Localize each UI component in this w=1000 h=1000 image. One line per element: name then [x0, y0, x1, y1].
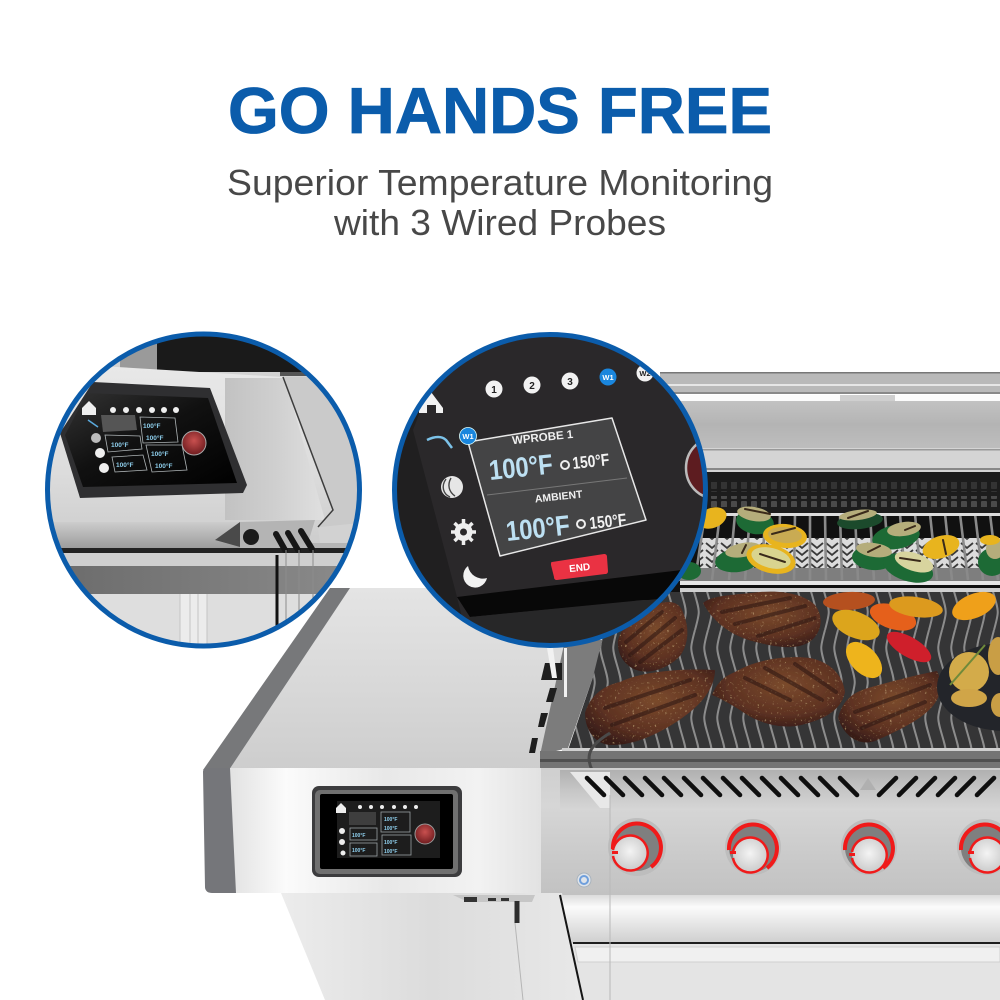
display logo: [415, 824, 435, 844]
screen icons: [82, 401, 179, 473]
right side panel: [282, 376, 334, 528]
screen temperatures: 100°F: [143, 422, 160, 430]
screen temperatures: 100°F: [116, 461, 133, 469]
ambient label: AMBIENT: [534, 488, 584, 505]
callout: display detail: [397, 337, 703, 643]
knob 3: [841, 819, 897, 875]
steak sear marks: [605, 598, 930, 728]
display temperatures: 100°F: [384, 840, 397, 846]
target temperature: 150°F: [571, 450, 610, 473]
number buttons: 1: [491, 385, 497, 396]
icon: probe: [427, 437, 452, 448]
peppers: [823, 586, 1000, 685]
side panel front: [203, 768, 541, 893]
end button: END: [569, 562, 591, 575]
screen temperatures: 100°F: [151, 450, 168, 458]
skillet with potatoes: [937, 637, 1000, 731]
ambient target temperature: 150°F: [588, 510, 627, 533]
side shelf: [203, 588, 565, 770]
grill wall: [540, 640, 610, 755]
display temperatures: [352, 817, 397, 855]
display boxes: [349, 812, 411, 856]
title: GO HANDS FREE: [228, 74, 772, 147]
left bezel: [397, 412, 461, 614]
lit highlight: [225, 378, 325, 520]
lower black band: [457, 569, 690, 617]
display icons: [336, 803, 418, 856]
subtitle: [227, 162, 773, 243]
side cabinet: [281, 893, 583, 1000]
lower rail: [54, 524, 348, 644]
grilled zucchini: [677, 503, 1000, 588]
w1 badge: W1: [462, 432, 474, 441]
screen logo: [182, 431, 206, 455]
display temperatures: 100°F: [384, 817, 397, 823]
base dark: [413, 337, 703, 620]
icon: home: [419, 392, 443, 413]
knob 1: [608, 818, 666, 876]
callout: probe ports: [50, 336, 357, 644]
screen temperatures: 100°F: [155, 462, 172, 470]
subtitle: with 3 Wired Probes: [333, 202, 666, 243]
w1 badge: [460, 428, 476, 444]
screen temperatures: 100°F: [146, 434, 163, 442]
probe in steak: [589, 733, 610, 792]
lower drawer: [560, 895, 1000, 1000]
subtitle: Superior Temperature Monitoring: [227, 162, 773, 203]
ambient target icon: [577, 520, 585, 528]
display temperatures: 100°F: [352, 833, 365, 839]
number buttons: W1: [602, 373, 614, 382]
callout 1 ring: [48, 334, 360, 646]
number buttons: 3: [567, 377, 573, 388]
cooking grates: [540, 592, 1000, 768]
number buttons: [486, 364, 654, 398]
callout 2 ring: [394, 334, 706, 646]
probe ports under panel: [453, 895, 535, 1000]
end button: [551, 554, 608, 580]
knob 2: [725, 819, 781, 875]
warming rack: [660, 513, 1000, 592]
screen boxes: [101, 415, 187, 472]
screen temperatures: [111, 422, 172, 470]
red logo: [684, 444, 703, 497]
bottom trim: [650, 599, 657, 600]
number buttons: W2: [639, 369, 651, 378]
console lid: [50, 366, 321, 482]
probe wire: [609, 795, 611, 1000]
top dark area: [120, 336, 306, 376]
probe label: WPROBE 1: [512, 429, 574, 447]
ambient temperature: 100°F: [504, 509, 571, 547]
brand emblem: [860, 778, 876, 790]
display screen: [65, 393, 237, 487]
display temperatures: 100°F: [352, 848, 365, 854]
display bezel: [60, 382, 247, 498]
steaks: [585, 592, 940, 745]
base panel: [112, 361, 354, 543]
wall posts: [547, 648, 567, 697]
grill illustration: [203, 372, 1000, 1000]
icon: globe: [441, 476, 463, 498]
power button: [577, 873, 591, 887]
display temperatures: 100°F: [384, 849, 397, 855]
panel display: [312, 786, 462, 877]
icon: gear: [451, 519, 476, 545]
probe data card: [460, 418, 646, 556]
screen temperatures: 100°F: [111, 441, 128, 449]
display temperatures: 100°F: [384, 826, 397, 832]
number buttons: 2: [529, 381, 535, 392]
knob 4: [957, 819, 1000, 875]
three probe cables: [276, 531, 313, 630]
front control panel: [538, 768, 1000, 895]
probe port housing: [215, 520, 315, 547]
vent slots: [587, 778, 994, 795]
target icon: [561, 461, 569, 469]
icon: moon: [463, 566, 487, 588]
probe temperature: 100°F: [487, 448, 554, 486]
side burner slots: [529, 663, 562, 753]
grill hood: [660, 372, 1000, 514]
